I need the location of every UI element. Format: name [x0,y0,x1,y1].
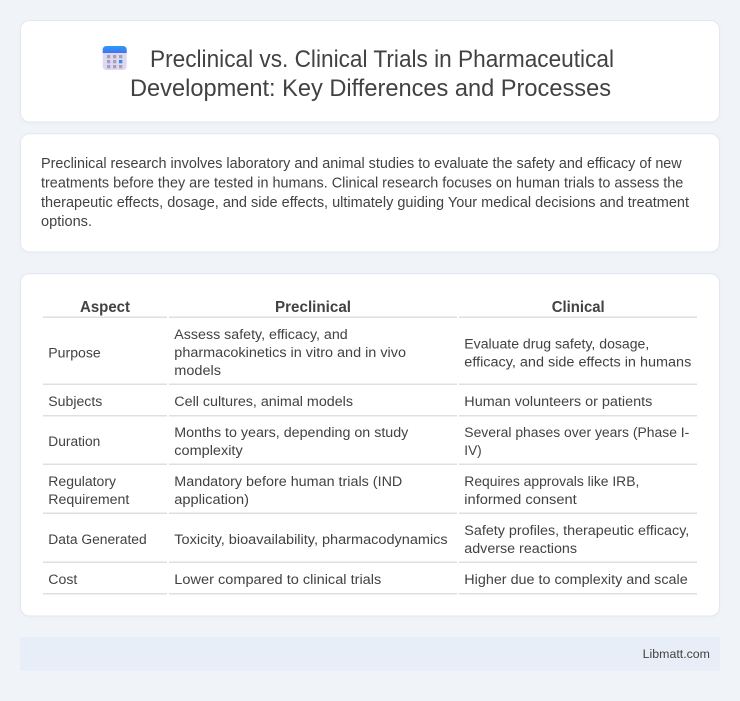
panel: title card [20,20,720,122]
row: cost: Cost [48,572,77,588]
row: data generated: Safety profiles, therapeutic efficacy, [464,523,689,539]
row: duration [43,425,697,465]
row: data generated: Toxicity, bioavailability, pharmacodynamics [174,532,448,548]
table header: Preclinical [275,299,351,316]
row: duration: complexity [174,443,244,459]
row: subjects: Cell cultures, animal models [174,394,353,410]
footer: Libmatt.com [643,647,710,661]
footer [20,637,720,671]
row: purpose [43,327,697,385]
row: cost [43,572,697,594]
row: regulatory requirement: informed consent [464,492,577,508]
row: regulatory requirement: Mandatory before human trials (IND [174,474,402,490]
row: duration: Duration [48,434,100,450]
text block: introduction: options. [41,214,92,230]
text block: introduction: therapeutic effects, dosage, and side effects, ultimately guiding Your medical decisions and treatment [41,195,689,211]
row: regulatory requirement: application) [174,492,249,508]
row: regulatory requirement: Requirement [48,492,129,508]
row: data generated [43,523,697,563]
table header [43,299,697,318]
row: purpose: models [174,363,221,379]
panel: comparison table [20,274,720,616]
row: data generated: adverse reactions [464,541,577,557]
table header: Clinical [552,299,605,316]
title: Preclinical vs. Clinical Trials in Pharmaceutical [150,46,614,73]
row: duration: Months to years, depending on study [174,425,409,441]
row: purpose: Assess safety, efficacy, and [174,327,348,343]
row: purpose: Purpose [48,345,101,361]
row: purpose: efficacy, and side effects in humans [464,354,691,370]
text block: introduction: Preclinical research involves laboratory and animal studies to evaluate the safety and efficacy of new [41,156,682,172]
row: data generated: Data Generated [48,532,147,548]
row: regulatory requirement: Regulatory [48,474,117,490]
text block: introduction [41,156,689,230]
panel: introduction [20,134,720,252]
row: duration: IV) [464,443,482,459]
row: regulatory requirement: Requires approvals like IRB, [464,474,639,490]
row: subjects: Human volunteers or patients [464,394,652,410]
row: regulatory requirement [43,474,697,514]
text block: introduction: treatments before they are tested in humans. Clinical research focuses on human trials to assess the [41,176,683,192]
title: Development: Key Differences and Processes [130,75,611,102]
row: cost: Higher due to complexity and scale [464,572,688,588]
icon: calendar [103,46,127,70]
row: purpose: Evaluate drug safety, dosage, [464,336,649,352]
row: purpose: pharmacokinetics in vitro and in vivo [174,345,406,361]
row: duration: Several phases over years (Phase I- [464,425,690,441]
row: cost: Lower compared to clinical trials [174,572,381,588]
table header: Aspect [80,299,131,316]
title [130,46,614,102]
row: subjects [43,394,697,416]
row: subjects: Subjects [48,394,102,410]
